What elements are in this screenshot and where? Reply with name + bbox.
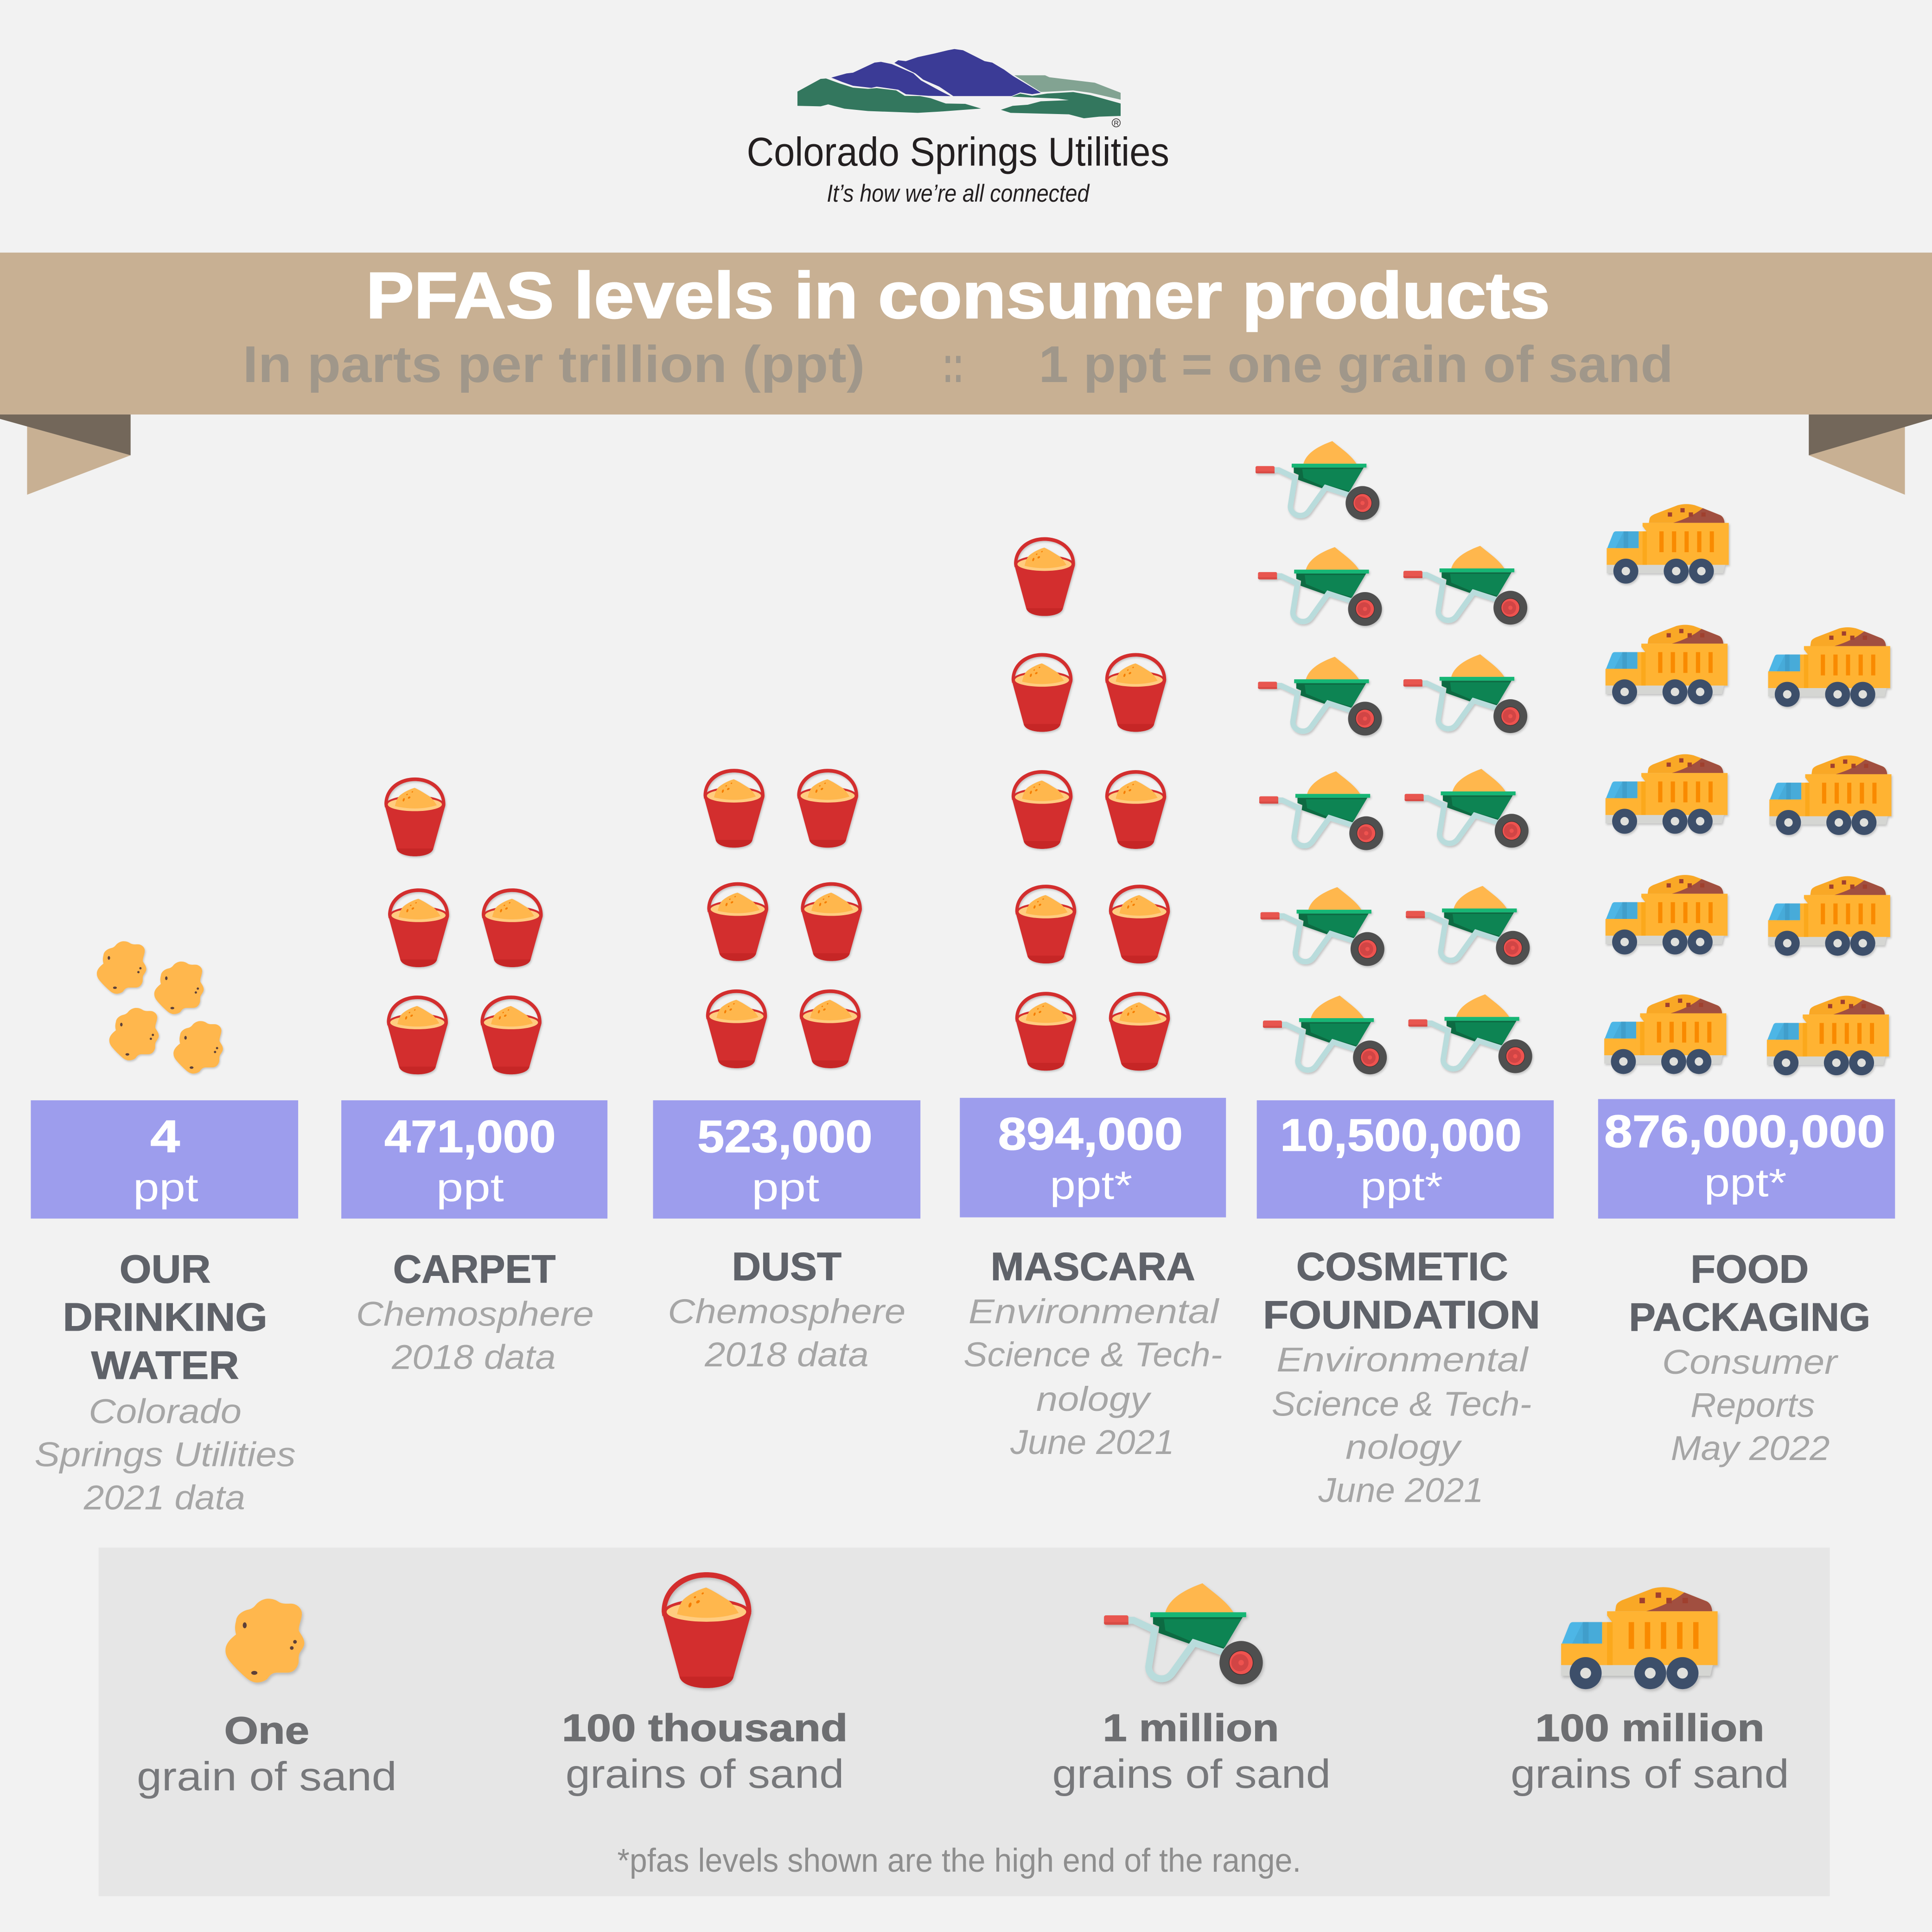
icons: trucks [1604,504,1891,1075]
value box: 894,000 ppt*: 894,000 [998,1108,1183,1159]
value box: 4 ppt: 4 [150,1111,180,1162]
legend item: wheelbarrow: grains of sand [1052,1751,1331,1797]
column: our drinking water [31,941,298,1517]
logo name: Colorado Springs Utilities [746,129,1169,175]
label: cosmetic foundation: Environmental [1276,1340,1529,1379]
value box: 4 ppt [31,1100,298,1218]
legend item: truck: 100 million [1535,1707,1765,1749]
value box: 471,000 ppt [341,1100,607,1218]
label: cosmetic foundation: FOUNDATION [1263,1293,1540,1337]
logo: Colorado Springs Utilities [746,49,1169,207]
label: food packaging: Consumer [1662,1343,1839,1381]
subtitle: one grain of sand: 1 ppt = one grain of sand [1039,335,1673,393]
label: our drinking water: DRINKING [63,1295,268,1339]
value box: 894,000 ppt*: ppt* [1050,1164,1132,1208]
subtitle: parts per trillion: In parts per trillion (ppt) [243,335,865,393]
label: food packaging: FOOD [1690,1247,1809,1291]
label: cosmetic foundation: nology [1345,1428,1462,1467]
label: mascara: Science & Tech- [963,1335,1222,1374]
icons: buckets [703,769,862,1068]
title: PFAS levels in consumer products [366,259,1550,332]
label: food packaging: PACKAGING [1629,1295,1870,1339]
label: dust: Chemosphere [668,1292,905,1331]
label: food packaging: May 2022 [1671,1429,1830,1467]
label: our drinking water [34,1247,296,1517]
legend item: bucket [562,1572,848,1797]
panel: legend [99,1548,1830,1896]
ribbon fold right [1809,414,1932,495]
column: mascara [960,537,1226,1461]
label: cosmetic foundation: COSMETIC [1296,1245,1508,1289]
value box: 876,000,000 ppt*: ppt* [1704,1161,1786,1205]
label: carpet: Chemosphere [356,1294,594,1333]
legend item: one grain [137,1599,397,1799]
legend item: one grain: One [224,1709,309,1752]
registered mark [1112,119,1120,128]
legend item: wheelbarrow: 1 million [1103,1707,1279,1749]
label: carpet: 2018 data [391,1338,556,1377]
label: cosmetic foundation: June 2021 [1318,1471,1484,1510]
label: our drinking water: OUR [120,1247,210,1291]
value box: 10,500,000 ppt*: 10,500,000 [1280,1109,1522,1160]
legend item: truck: grains of sand [1511,1751,1789,1797]
legend item: one grain: grain of sand [137,1753,397,1799]
column: food packaging [1598,504,1895,1467]
column: dust [653,769,920,1374]
label: dust: DUST [732,1245,842,1289]
icons: buckets [1012,537,1170,1071]
subtitle separator: :: [943,335,963,393]
value box: 523,000 ppt: 523,000 [697,1111,873,1162]
label: our drinking water: 2021 data [83,1478,245,1517]
value box: 471,000 ppt: ppt [436,1166,504,1210]
label: mascara: June 2021 [1010,1423,1174,1461]
legend item: bucket: 100 thousand [562,1707,848,1749]
label: mascara: Environmental [969,1292,1220,1331]
ribbon fold left [0,414,131,495]
label: food packaging [1629,1247,1870,1467]
label: our drinking water: WATER [91,1344,239,1388]
value box: 876,000,000 ppt*: 876,000,000 [1604,1106,1885,1157]
logo mountains [797,49,1121,118]
label: mascara: MASCARA [991,1245,1195,1289]
label: food packaging: Reports [1690,1386,1815,1424]
value box: 876,000,000 ppt* [1598,1099,1895,1218]
column: carpet [341,778,607,1377]
value box: 523,000 ppt [653,1100,920,1218]
label: mascara: nology [1036,1380,1152,1418]
logo tagline: It’s how we’re all connected [827,180,1090,207]
value box: 4 ppt: ppt [133,1166,198,1210]
label: cosmetic foundation: Science & Tech- [1272,1384,1531,1423]
legend item: truck [1511,1587,1789,1797]
registered mark: R [1114,120,1119,128]
value box: 523,000 ppt: ppt [752,1166,819,1210]
value box: 10,500,000 ppt* [1257,1100,1554,1218]
value box: 10,500,000 ppt*: ppt* [1360,1165,1443,1209]
legend item: bucket: grains of sand [566,1751,844,1797]
column: cosmetic foundation [1256,441,1554,1510]
value box: 471,000 ppt: 471,000 [384,1111,556,1162]
label: dust [668,1245,905,1374]
icons: wheelbarrows [1256,441,1532,1074]
label: our drinking water: Colorado [89,1392,242,1430]
value box: 894,000 ppt* [960,1098,1226,1218]
label: our drinking water: Springs Utilities [34,1435,296,1473]
icons: buckets [384,778,543,1074]
label: dust: 2018 data [704,1335,869,1374]
banner ribbon [0,253,1932,495]
label: cosmetic foundation [1263,1245,1540,1510]
label: carpet: CARPET [393,1247,556,1291]
footnote: *pfas levels shown are the high end of the range. [617,1842,1301,1879]
label: mascara [963,1245,1222,1461]
icons: 4 grains [97,941,223,1074]
legend item: wheelbarrow [1052,1583,1331,1797]
label: carpet [356,1247,594,1377]
